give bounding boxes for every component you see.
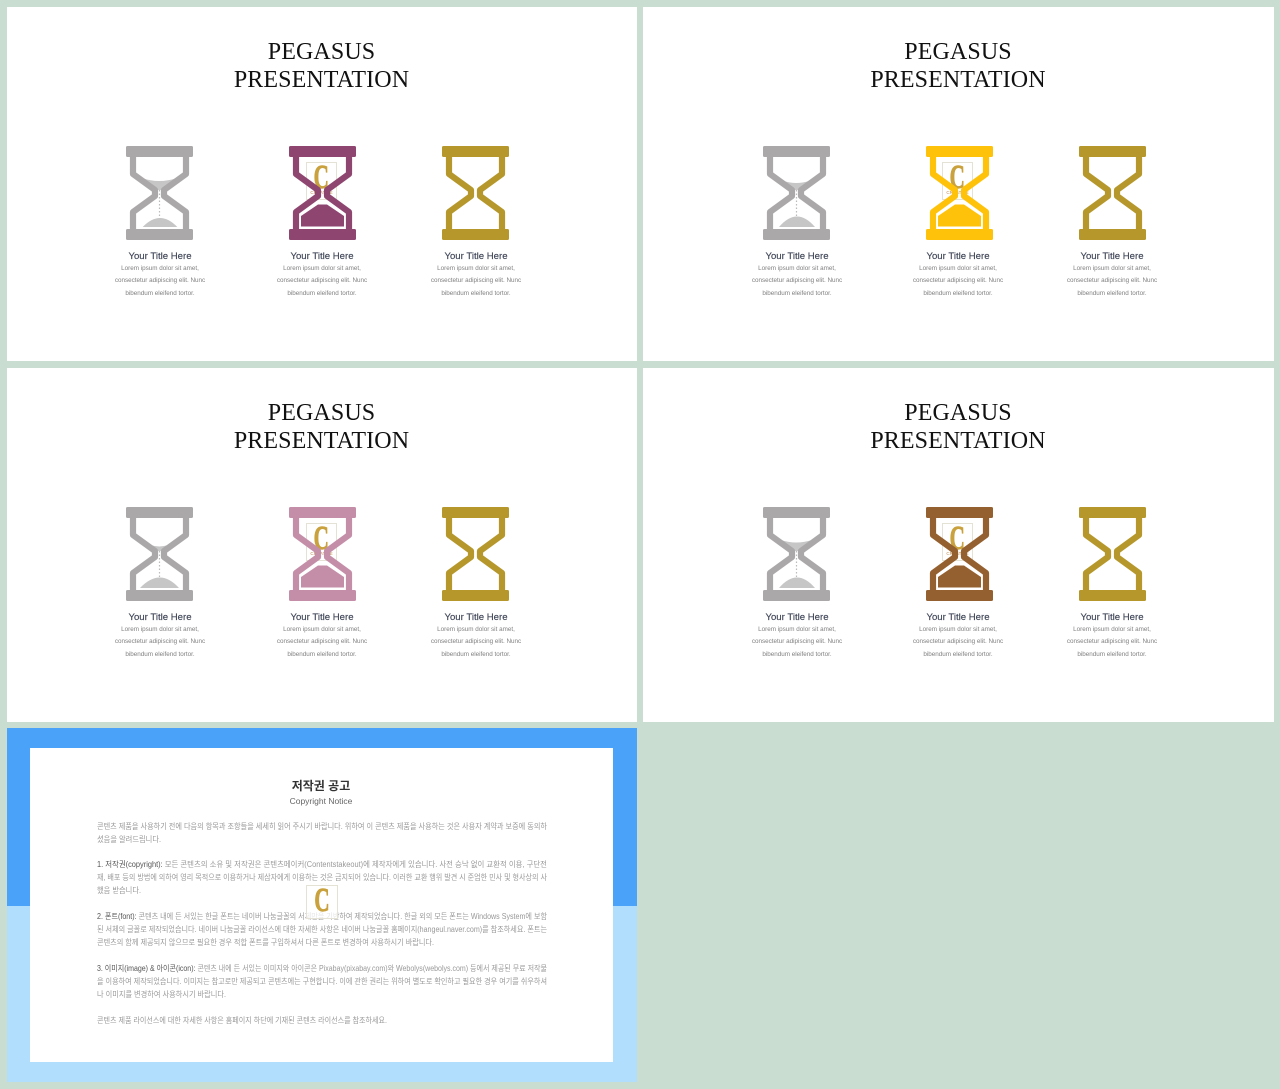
- title: [234, 39, 409, 93]
- item: pink hourglass with logo: Your Title Here: [290, 612, 354, 623]
- title: PRESENTATION: [234, 67, 409, 93]
- item: gray hourglass: [752, 146, 842, 297]
- item: gold hourglass: [431, 507, 521, 658]
- item: gold hourglass: Lorem ipsum dolor sit amet,: [437, 265, 515, 272]
- logo watermark: CREATIVE: [946, 190, 969, 195]
- notice body text: 1. 저작권(copyright): 모든 콘텐츠의 소유 및 저작권은 콘텐츠메이커(Contentstakeout)에 제작자에게 있습니다. 사전 승낙 없이 교환적 이용, 구단전: [97, 859, 547, 869]
- item: maroon hourglass with logo: bibendum eleifend tortor.: [287, 290, 357, 297]
- item: yellow hourglass with logo: Your Title Here: [926, 251, 990, 262]
- slide 1: maroon hourglass: [7, 7, 637, 361]
- logo watermark: [942, 523, 973, 561]
- item: gold hourglass: consectetur adipiscing elit. Nunc: [1067, 638, 1157, 645]
- title: PRESENTATION: [234, 428, 409, 454]
- item: gold hourglass: Lorem ipsum dolor sit amet,: [437, 626, 515, 633]
- item: gray hourglass: bibendum eleifend tortor.: [125, 290, 195, 297]
- title: PEGASUS: [268, 400, 375, 426]
- logo watermark: CREATIVE: [310, 190, 333, 195]
- item: gray hourglass: consectetur adipiscing elit. Nunc: [115, 638, 205, 645]
- item: gold hourglass: Your Title Here: [444, 251, 508, 262]
- notice body text: 나 이미지를 변경하여 사용하시기 바랍니다.: [97, 989, 226, 999]
- logo watermark: [942, 162, 973, 200]
- item: pink hourglass with logo: consectetur adipiscing elit. Nunc: [277, 638, 367, 645]
- item: gold hourglass: bibendum eleifend tortor.: [1077, 651, 1147, 658]
- title: [234, 400, 409, 454]
- notice body text: 셨음을 알려드립니다.: [97, 834, 161, 844]
- item: maroon hourglass with logo: Your Title Here: [290, 251, 354, 262]
- notice body text: 했음 받습니다.: [97, 885, 141, 895]
- item: gray hourglass: bibendum eleifend tortor.: [762, 290, 832, 297]
- slide 2: yellow hourglass: [643, 7, 1274, 361]
- item: gold hourglass: Lorem ipsum dolor sit amet,: [1073, 265, 1151, 272]
- logo watermark: C: [314, 159, 329, 196]
- item: gray hourglass: Your Title Here: [765, 612, 829, 623]
- title: PEGASUS: [904, 400, 1012, 426]
- item: brown hourglass with logo: [913, 507, 1003, 658]
- item: gray hourglass: Lorem ipsum dolor sit amet,: [121, 626, 199, 633]
- item: pink hourglass with logo: [277, 507, 367, 658]
- title: PEGASUS: [268, 39, 375, 65]
- notice body text: 재, 배포 등의 방법에 의하여 영리 목적으로 이용하거나 제삼자에게 이용하는 것은 금지되어 있습니다. 이러한 교환 행위 발견 시 준엄한 민사 및 형사상의 사: [97, 872, 547, 882]
- item: gray hourglass: consectetur adipiscing elit. Nunc: [752, 277, 842, 284]
- item: pink hourglass with logo: bibendum eleifend tortor.: [287, 651, 357, 658]
- item: gold hourglass: bibendum eleifend tortor.: [441, 651, 511, 658]
- logo watermark: C: [950, 159, 965, 196]
- logo watermark: C: [950, 520, 965, 557]
- item: gray hourglass: bibendum eleifend tortor.: [125, 651, 195, 658]
- item: gray hourglass: Lorem ipsum dolor sit amet,: [121, 265, 199, 272]
- item: brown hourglass with logo: consectetur adipiscing elit. Nunc: [913, 638, 1003, 645]
- slide 4: brown hourglass: [643, 368, 1274, 722]
- item: gray hourglass: Your Title Here: [765, 251, 829, 262]
- item: brown hourglass with logo: Lorem ipsum dolor sit amet,: [919, 626, 997, 633]
- logo watermark: C: [314, 882, 330, 919]
- slide 5: copyright notice: [7, 728, 637, 1082]
- notice body text: 을 이용하여 제작되었습니다. 이미지는 참고로만 제공되고 콘텐츠에는 구현합니다. 이에 관한 권리는 위하여 별도로 확인하고 필요한 경우 여기를 쉬우하셔: [97, 976, 547, 986]
- title: [870, 39, 1046, 93]
- logo watermark: C: [314, 520, 329, 557]
- heading: 저작권 공고: [292, 778, 350, 793]
- item: gray hourglass: consectetur adipiscing elit. Nunc: [115, 277, 205, 284]
- notice body text: 콘텐츠 제품 라이선스에 대한 자세한 사항은 홈페이지 하단에 기재된 콘텐츠 라이선스를 참조하세요.: [97, 1015, 387, 1025]
- item: gray hourglass: Lorem ipsum dolor sit amet,: [758, 265, 836, 272]
- title: [870, 400, 1046, 454]
- notice body text: 3. 이미지(image) & 아이콘(icon): 콘텐츠 내에 든 서있는 이미지와 아이콘은 Pixabay(pixabay.com)와 Webolys(webolys.com) 등에서 제공된 무료 저작물: [97, 963, 547, 973]
- item: gray hourglass: [115, 507, 205, 658]
- notice body text: 콘텐츠 제품을 사용하기 전에 다음의 항목과 조항들을 세세히 읽어 주시기 바랍니다. 위하여 이 콘텐츠 제품을 사용하는 것은 사용자 계약과 보증에 동의하: [97, 821, 547, 831]
- item: gold hourglass: bibendum eleifend tortor.: [1077, 290, 1147, 297]
- item: yellow hourglass with logo: bibendum eleifend tortor.: [923, 290, 993, 297]
- notice card: [30, 748, 613, 1062]
- item: gold hourglass: Your Title Here: [1080, 612, 1144, 623]
- item: gold hourglass: Lorem ipsum dolor sit amet,: [1073, 626, 1151, 633]
- logo watermark: [306, 162, 337, 200]
- item: gold hourglass: Your Title Here: [1080, 251, 1144, 262]
- title: PRESENTATION: [870, 67, 1046, 93]
- item: gold hourglass: Your Title Here: [444, 612, 508, 623]
- item: gold hourglass: consectetur adipiscing elit. Nunc: [1067, 277, 1157, 284]
- item: gold hourglass: [431, 146, 521, 297]
- notice body text: [97, 821, 547, 1025]
- logo watermark: [306, 523, 337, 561]
- item: gray hourglass: Lorem ipsum dolor sit amet,: [758, 626, 836, 633]
- slide 3: pink hourglass: [7, 368, 637, 722]
- item: yellow hourglass with logo: Lorem ipsum dolor sit amet,: [919, 265, 997, 272]
- item: brown hourglass with logo: Your Title Here: [926, 612, 990, 623]
- item: gray hourglass: [115, 146, 205, 297]
- logo watermark: CREATIVE: [310, 551, 333, 556]
- title: PEGASUS: [904, 39, 1012, 65]
- item: gray hourglass: [752, 507, 842, 658]
- item: gold hourglass: [1067, 146, 1157, 297]
- subheading: Copyright Notice: [290, 796, 353, 806]
- logo watermark: CREATIVE: [946, 551, 969, 556]
- item: gray hourglass: Your Title Here: [128, 612, 192, 623]
- item: gray hourglass: consectetur adipiscing elit. Nunc: [752, 638, 842, 645]
- notice body text: 2. 폰트(font): 콘텐츠 내에 든 서있는 한글 폰트는 네이버 나눔글꼴의 서체만을 기반하여 제작되었습니다. 한글 외의 모든 폰트는 Windows System에 보함: [97, 911, 547, 921]
- notice body text: 된 서체의 글꼴로 제작되었습니다. 네이버 나눔글꼴 라이선스에 대한 자세한 사항은 네이버 나눔글꼴 홈페이지(hangeul.naver.com)를 참조하세요. 폰트는: [97, 924, 547, 934]
- item: brown hourglass with logo: bibendum eleifend tortor.: [923, 651, 993, 658]
- item: maroon hourglass with logo: consectetur adipiscing elit. Nunc: [277, 277, 367, 284]
- item: gray hourglass: bibendum eleifend tortor.: [762, 651, 832, 658]
- item: gold hourglass: consectetur adipiscing elit. Nunc: [431, 638, 521, 645]
- title: PRESENTATION: [870, 428, 1046, 454]
- item: maroon hourglass with logo: Lorem ipsum dolor sit amet,: [283, 265, 361, 272]
- item: yellow hourglass with logo: consectetur adipiscing elit. Nunc: [913, 277, 1003, 284]
- item: yellow hourglass with logo: [913, 146, 1003, 297]
- item: gold hourglass: consectetur adipiscing elit. Nunc: [431, 277, 521, 284]
- item: gold hourglass: bibendum eleifend tortor.: [441, 290, 511, 297]
- item: pink hourglass with logo: Lorem ipsum dolor sit amet,: [283, 626, 361, 633]
- item: gray hourglass: Your Title Here: [128, 251, 192, 262]
- item: gold hourglass: [1067, 507, 1157, 658]
- logo watermark: [306, 882, 338, 919]
- item: maroon hourglass with logo: [277, 146, 367, 297]
- notice body text: 콘텐츠의 함께 제공되지 않으므로 필요한 경우 적합 폰트를 구입하셔서 다른 폰트로 변경하여 사용하시기 바랍니다.: [97, 937, 434, 947]
